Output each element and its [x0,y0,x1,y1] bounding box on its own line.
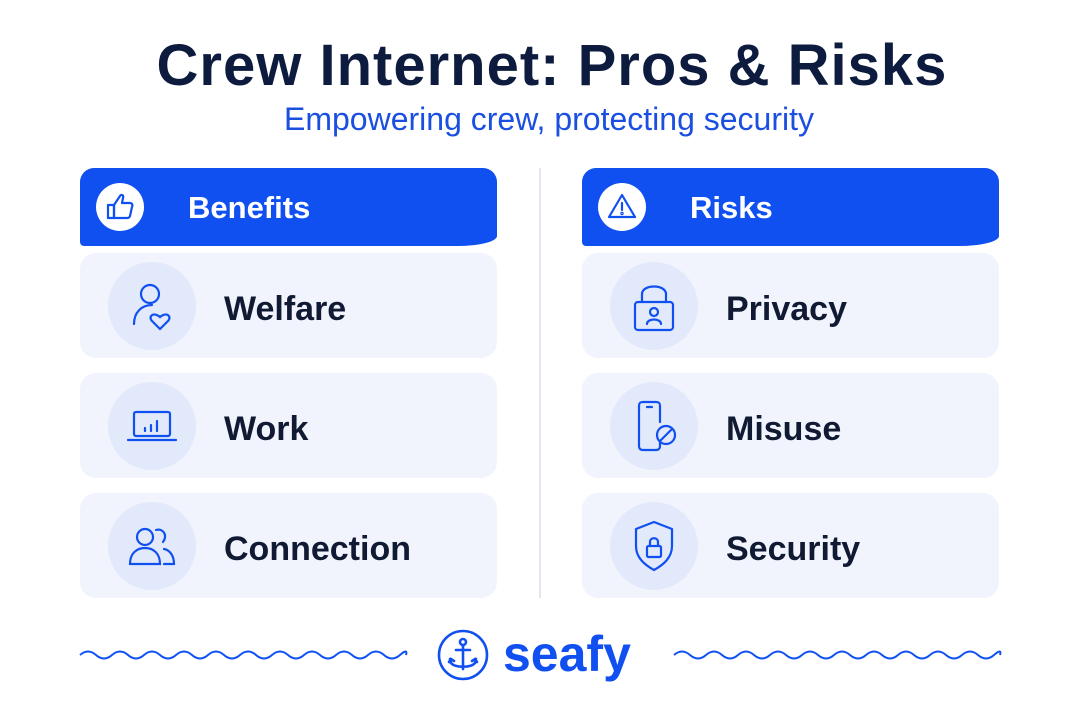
logo: wordmark: seafy [503,626,631,682]
divider [539,168,541,598]
card: work: Work [224,410,308,448]
card: security: Security [726,530,860,568]
header: benefits: Benefits [188,190,310,225]
panel: benefits [80,168,497,598]
footer: waves and logo [79,626,1002,682]
header: risks [582,168,999,246]
card: welfare: Welfare [224,290,346,328]
header: risks: Risks [690,190,773,225]
card: misuse [582,373,999,478]
card: security [582,493,999,598]
card: connection [80,493,497,598]
card: privacy: Privacy [726,290,847,328]
icon: thumbs up [96,183,144,231]
subtitle: Empowering crew, protecting security [284,101,814,137]
card: welfare [80,253,497,358]
icon: laptop chart [108,382,196,470]
header: benefits [80,168,497,246]
card: connection: Connection [224,530,411,568]
card: misuse: Misuse [726,410,841,448]
panel: risks [582,168,999,598]
logo: anchor icon [438,630,488,680]
card: work [80,373,497,478]
icon: shield lock [610,502,698,590]
icon: warning [598,183,646,231]
icon: phone blocked [610,382,698,470]
icon: lock person [610,262,698,350]
icon: person heart [108,262,196,350]
title: Crew Internet: Pros & Risks [157,33,947,98]
icon: people [108,502,196,590]
card: privacy [582,253,999,358]
